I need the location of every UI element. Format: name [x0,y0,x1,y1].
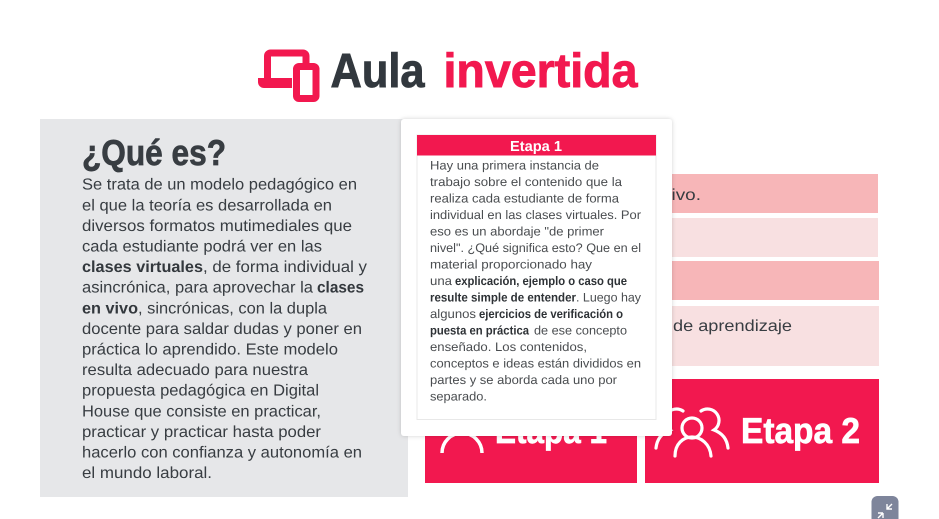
popup text: enseñado. Los contenidos, [430,340,587,354]
row 1: vivo. [662,187,701,204]
row 2 [660,218,878,257]
popup text: trabajo sobre el contenido que la [430,175,622,189]
panel: qué es [40,119,408,497]
icon: person [442,433,482,453]
text block: definition: el que la teoría es desarrollada en [82,197,332,214]
popup text: de ese concepto [534,324,627,338]
text block: definition: clases virtuales [82,259,203,276]
text block: definition: en vivo [82,300,138,317]
popup header: Etapa 1 [510,139,562,155]
row 4 [660,306,879,366]
popup text: individual en las clases virtuales. Por [430,208,641,222]
label: etapa 1: Etapa 1 [495,410,607,451]
text block: definition: , sincrónicas, con la dupla [138,300,327,317]
popup text: algunos [430,307,476,321]
popup text: material proporcionado hay [430,258,593,272]
text block: definition: House que consiste en practicar, [82,403,321,420]
text block: definition: clases [317,280,364,297]
icon: laptop and phone [258,53,316,98]
card: etapa 1 [425,379,637,483]
card: etapa 2 [645,379,879,483]
popup: etapa 1 detail [401,119,672,436]
popup text: ejercicios de verificación o [479,307,623,321]
title: invertida: invertida [444,45,638,98]
popup text: eso es un abordaje "de primer [430,224,604,238]
text block: definition: Se trata de un modelo pedagógico en [82,177,357,194]
popup text: puesta en práctica [430,324,529,338]
icon: collapse button [872,496,898,519]
label: etapa 2: Etapa 2 [741,410,860,451]
text block: definition: práctica lo aprendido. Este modelo [82,342,338,358]
popup text: partes y se aborda cada uno por [430,373,617,387]
popup text: una [430,274,452,288]
text block: definition [82,177,367,482]
title: Aula: Aula [330,45,425,98]
table rows [660,174,879,366]
popup text: separado. [430,390,487,404]
icon: group of people [656,409,728,456]
popup header [417,135,656,156]
popup text: explicación, ejemplo o caso que [455,274,627,288]
row 3 [660,261,879,300]
popup text: conceptos e ideas están divididos en [430,356,641,370]
text block: definition: resulta adecuado para nuestra [82,362,308,379]
text block: definition: hacerlo con confianza y autonomía en [82,444,362,462]
popup text: . Luego hay [576,290,642,304]
popup text: resulte simple de entender [430,290,576,304]
row 4: de aprendizaje [673,318,792,335]
text block: definition: asincrónica, para aprovechar la [82,280,313,297]
text block: definition: cada estudiante podrá ver en las [82,238,322,256]
text block: definition: propuesta pedagógica en Digital [82,383,319,400]
row 1 [660,174,878,213]
text block: definition: practicar y practicar hasta poder [82,424,322,441]
popup text: realiza cada estudiante de forma [430,192,619,206]
text block: definition: docente para saldar dudas y poner en [82,321,362,338]
popup text [430,158,642,404]
heading: qué es: ¿Qué es? [82,132,226,173]
text block: definition: , de forma individual y [203,259,367,276]
text block: definition: el mundo laboral. [82,465,212,482]
popup text: Hay una primera instancia de [430,158,599,172]
popup text: nivel". ¿Qué significa esto? Que en el [430,241,641,255]
text block: definition: diversos formatos mutimediales que [82,218,352,235]
title with icon [258,45,638,98]
